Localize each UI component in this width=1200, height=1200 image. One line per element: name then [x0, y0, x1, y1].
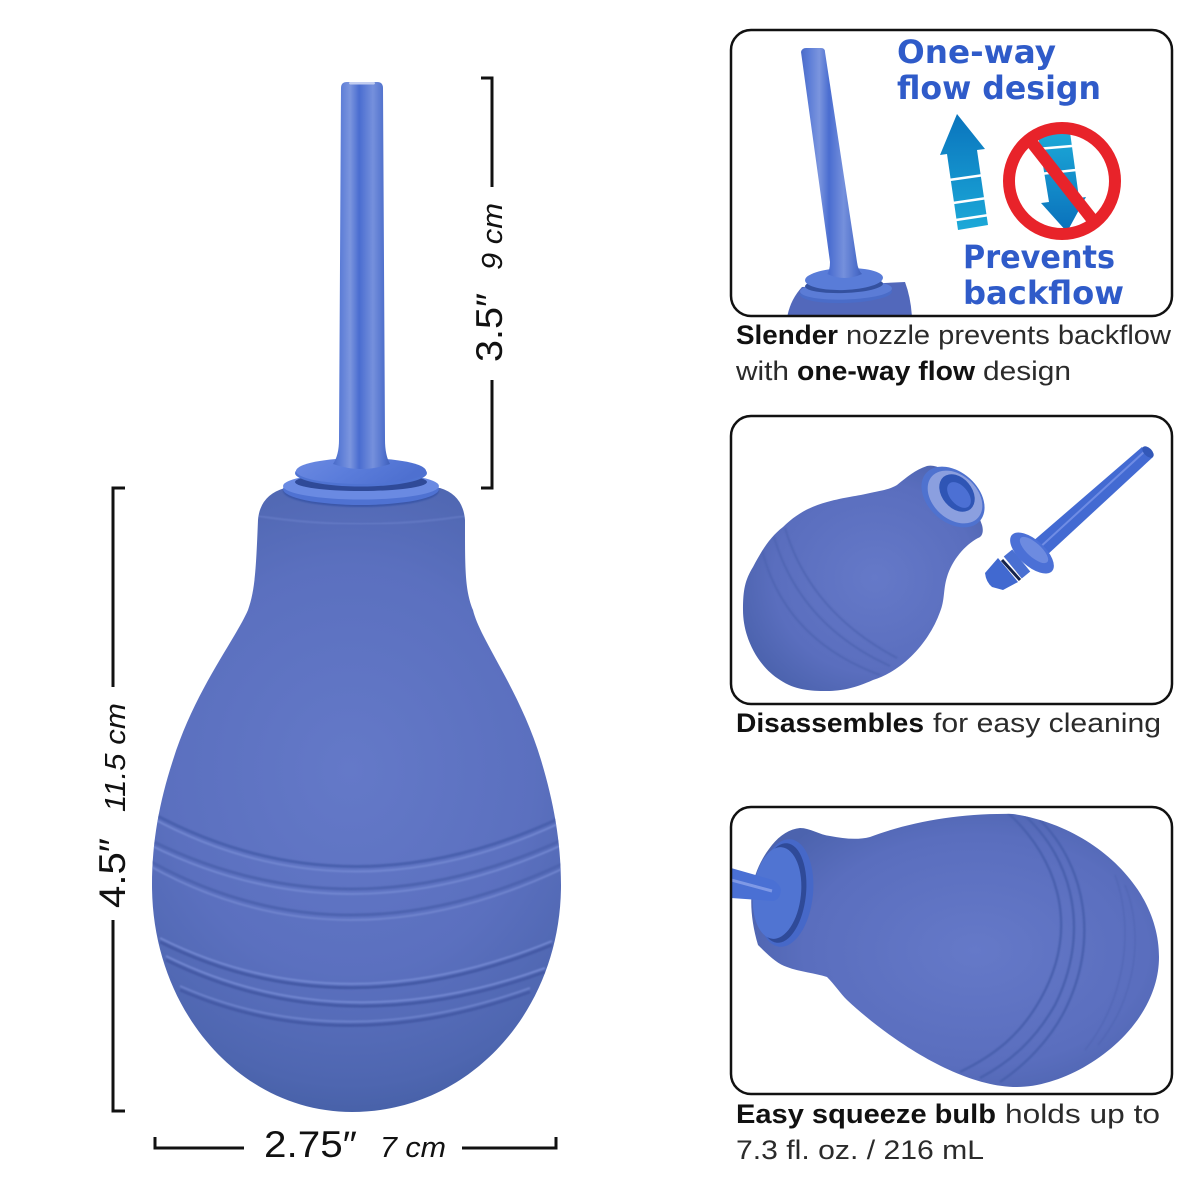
- caption: easy squeeze bulb: [736, 1099, 1160, 1165]
- caption: disassembles: Disassembles: [736, 708, 924, 738]
- caption: easy squeeze bulb: 7.3 fl. oz. / 216 mL: [736, 1135, 984, 1165]
- label: 2.75 inches: 2.75″: [264, 1124, 357, 1165]
- tilted bulb photo: [731, 812, 1159, 1087]
- label: 9 cm: 9 cm: [477, 203, 509, 270]
- label: 7 cm: 7 cm: [380, 1132, 446, 1164]
- bulb body: [148, 488, 562, 1112]
- heading: prevents backflow: [963, 238, 1124, 312]
- caption: slender nozzle: with: [735, 356, 789, 386]
- nozzle tube: [333, 82, 390, 469]
- main product: bulb with nozzle: [148, 82, 562, 1112]
- icon: up arrow: [940, 114, 989, 230]
- panel: disassembled: [731, 416, 1172, 704]
- tilted nozzle photo: [787, 48, 912, 318]
- disassembled nozzle: [985, 444, 1156, 590]
- heading: one-way flow design: flow design: [897, 69, 1101, 107]
- icon: prohibited down arrow: [1009, 128, 1115, 234]
- caption: slender nozzle: nozzle prevents backflow: [846, 320, 1172, 350]
- caption: disassembles: [736, 708, 1161, 738]
- label: 3.5 inches: 3.5″: [469, 293, 510, 362]
- caption: slender nozzle: [735, 320, 1172, 386]
- heading: prevents backflow: backflow: [963, 274, 1124, 312]
- caption: slender nozzle: design: [983, 356, 1071, 386]
- caption: disassembles: for easy cleaning: [933, 708, 1161, 738]
- label: 11.5 cm: 11.5 cm: [100, 703, 132, 812]
- dimension: bulb height: [92, 488, 133, 1111]
- caption: slender nozzle: Slender: [736, 320, 838, 350]
- label: 4.5 inches: 4.5″: [92, 838, 133, 908]
- panel: squeeze bulb: [731, 807, 1172, 1094]
- nozzle flange discs: [283, 458, 439, 507]
- panel: one-way flow: [731, 30, 1172, 318]
- caption: easy squeeze bulb: Easy squeeze bulb: [736, 1099, 996, 1129]
- heading: one-way flow design: One-way: [897, 33, 1056, 71]
- caption: slender nozzle: one-way flow: [797, 356, 976, 386]
- heading: one-way flow design: [897, 33, 1101, 107]
- dimension: bulb width: [155, 1124, 556, 1165]
- dimension: nozzle height: [469, 78, 510, 488]
- caption: easy squeeze bulb: holds up to: [1005, 1099, 1160, 1129]
- heading: prevents backflow: Prevents: [963, 238, 1115, 276]
- disassembled bulb: [743, 454, 996, 691]
